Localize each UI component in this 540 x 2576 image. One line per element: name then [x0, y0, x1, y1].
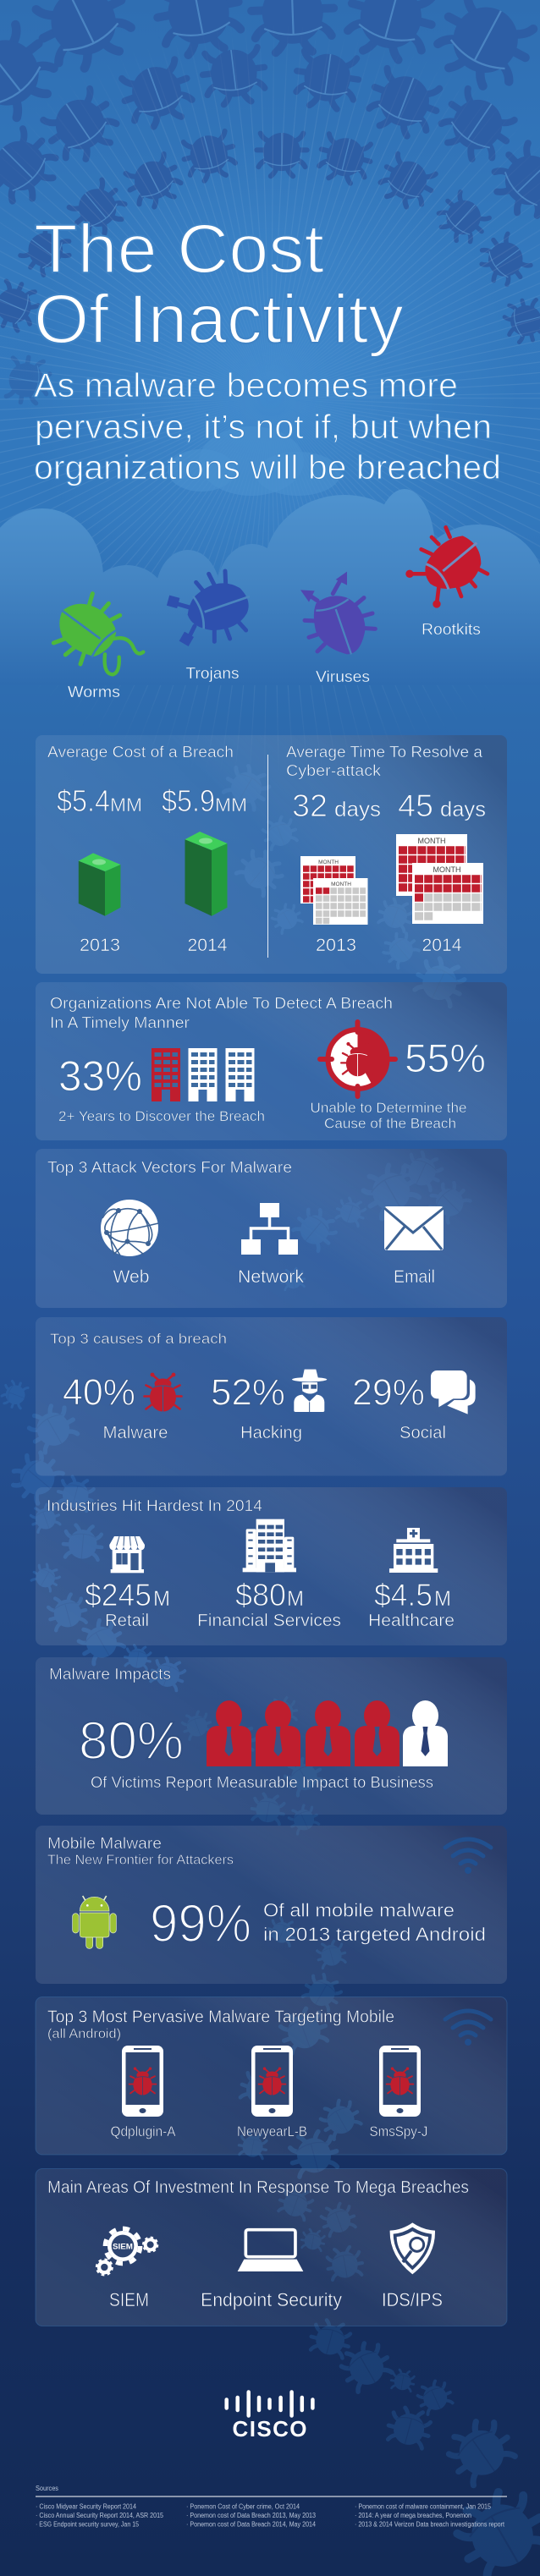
icon: SIEM gears [96, 2228, 157, 2275]
heading: average time: Average Time To Resolve a [286, 744, 483, 761]
sources: · 2014: A year of mega breaches, Ponemon [355, 2512, 471, 2519]
stat: financial services: Financial Services [197, 1612, 341, 1630]
bug labels: Rootkits [422, 621, 481, 638]
labels: SIEM [109, 2289, 149, 2310]
bug labels: Worms [68, 684, 120, 700]
icon: hacker [292, 1370, 327, 1412]
phone: Qdplugin-A: Qdplugin-A [110, 2123, 176, 2139]
stat: 2013 cost: MM [110, 794, 142, 816]
heading: In A Timely Manner [50, 1014, 190, 1031]
icon: email [384, 1206, 444, 1250]
icon: calendars 2014: MONTH [418, 837, 445, 845]
labels [103, 1424, 446, 1442]
subtitle: As malware becomes more [34, 367, 458, 404]
stat: 33%: 33% [58, 1052, 142, 1100]
icon: calendars 2013 [300, 856, 367, 925]
heading [50, 995, 393, 1031]
heading: Mobile Malware [47, 1835, 162, 1852]
cisco logo: CISCO [232, 2416, 306, 2441]
stat: financial services: M [287, 1587, 304, 1611]
background pattern: scattered bug trail [0, 761, 540, 2576]
text: android claim: in 2013 targeted Android [263, 1924, 486, 1945]
icon: network [241, 1203, 298, 1255]
labels: Malware [103, 1424, 168, 1442]
icon: buildings [152, 1048, 254, 1101]
panel: attack vectors [36, 1149, 507, 1308]
heading: average cost: Average Cost of a Breach [47, 744, 234, 761]
text: android claim [263, 1900, 486, 1945]
labels: Email [394, 1267, 435, 1287]
bug labels: Viruses [316, 668, 370, 685]
stat: 99%: 99% [150, 1894, 251, 1953]
labels [113, 1267, 435, 1287]
icon: SIEM gears: SIEM [113, 2242, 133, 2250]
icon: calendars 2014: MONTH [433, 865, 460, 874]
stat: 45 days: 45 [398, 788, 433, 823]
caption: unable to determine: Unable to Determine the [310, 1101, 467, 1116]
heading: The New Frontier for Attackers [47, 1853, 234, 1868]
icon: money stack 2013 [79, 853, 120, 916]
stat: retail: M [153, 1587, 170, 1611]
sources: Sources [36, 2485, 58, 2492]
stat: 32 days: days [334, 798, 381, 821]
heading: Top 3 causes of a breach [50, 1331, 227, 1347]
caption: Of Victims Report Measurable Impact to Business [91, 1774, 433, 1791]
sources: · 2013 & 2014 Verizon Data breach investigations report [355, 2521, 505, 2528]
icon: shield [390, 2222, 435, 2274]
stat: 2013 cost [57, 783, 142, 818]
icon: android [73, 1896, 116, 1948]
phone: Qdplugin-A [110, 2046, 176, 2139]
caption: 2+ years: 2+ Years to Discover the Breach [58, 1109, 265, 1124]
icon: speech bubbles [431, 1370, 476, 1414]
heading: Malware Impacts [49, 1666, 171, 1683]
stat: retail [85, 1578, 170, 1630]
cisco logo [227, 2392, 312, 2441]
heading: average time: Cyber-attack [286, 762, 382, 779]
icon: virus bug [300, 572, 375, 654]
phone: NewyearL-B: NewyearL-B [237, 2123, 307, 2139]
stat: 2013 cost: $5.4 [57, 783, 110, 818]
sources: · Ponemon cost of Data Breach 2013, May 2013 [186, 2512, 316, 2519]
background pattern: radial bugs [0, 0, 540, 406]
sources: · Cisco Midyear Security Report 2014 [36, 2502, 136, 2511]
stat: 32 days [292, 788, 381, 823]
sources: · Cisco Annual Security Report 2014, ASR 2015 [36, 2512, 163, 2519]
stat: financial services: $80 [235, 1578, 286, 1612]
stat: 2014 cost: MM [215, 794, 247, 816]
sources: · Ponemon cost of malware containment, Jan 2015 [355, 2502, 491, 2511]
panel: causes [36, 1317, 507, 1475]
icon: calendars 2013: MONTH [318, 860, 339, 865]
title: The Cost [34, 211, 324, 288]
stat: 2014 cost: $5.9 [162, 783, 215, 818]
panel: average cost and time [36, 735, 507, 974]
icon: worm bug [53, 594, 143, 674]
labels: Endpoint Security [201, 2289, 342, 2310]
stat: 55%: 55% [405, 1035, 486, 1080]
text: android claim: Of all mobile malware [263, 1900, 455, 1920]
title [34, 211, 404, 358]
icon: money stack 2014 [185, 832, 227, 916]
stat: healthcare: $4.5 [374, 1578, 433, 1612]
stat: financial services [197, 1578, 341, 1630]
heading: Industries Hit Hardest In 2014 [47, 1497, 262, 1514]
caption: unable to determine [310, 1101, 467, 1132]
heading: Top 3 Attack Vectors For Malware [47, 1159, 292, 1176]
stat: healthcare [368, 1578, 455, 1630]
icon: wifi [445, 2011, 491, 2046]
heading: (all Android) [47, 2027, 121, 2041]
labels: Network [238, 1267, 304, 1287]
heading [47, 1835, 234, 1868]
heading: Top 3 Most Pervasive Malware Targeting Mobile [47, 2008, 394, 2027]
icon: calendars 2013: MONTH [331, 882, 351, 887]
year labels: cost: 2013 [80, 936, 120, 955]
icon: wifi [445, 1839, 491, 1874]
panel: malware impacts [36, 1657, 507, 1815]
stat: 45 days [398, 788, 486, 823]
stat: 29%: 29% [352, 1372, 425, 1413]
stat: 80%: 80% [79, 1711, 184, 1771]
labels: Web [113, 1267, 149, 1287]
stat: 52%: 52% [211, 1372, 285, 1413]
year labels: time [316, 936, 462, 955]
phone: SmsSpy-J: SmsSpy-J [369, 2123, 428, 2139]
year labels: cost [80, 936, 228, 955]
icon: rootkit bug [405, 527, 488, 608]
sources: · Ponemon Cost of Cyber crime, Oct 2014 [186, 2502, 300, 2511]
stat: healthcare: M [434, 1587, 451, 1611]
sources: · Ponemon cost of Data Breach 2014, May 2014 [186, 2521, 316, 2528]
icon: hospital [389, 1528, 438, 1573]
icon: trojan bug [167, 571, 250, 646]
subtitle [34, 367, 501, 486]
panel: industries [36, 1487, 507, 1645]
heading: Organizations Are Not Able To Detect A Breach [50, 995, 393, 1012]
panel: detection [36, 982, 507, 1140]
panel: investment [36, 2169, 507, 2326]
icon: store [109, 1536, 145, 1573]
year labels: cost: 2014 [188, 936, 228, 955]
heading: Main Areas Of Investment In Response To Mega Breaches [47, 2178, 469, 2197]
stat: 40%: 40% [63, 1372, 135, 1413]
stat: retail: $245 [85, 1578, 152, 1612]
labels: Hacking [240, 1424, 302, 1442]
heading: average time [286, 744, 483, 779]
stat: 2014 cost [162, 783, 247, 818]
subtitle: organizations will be breached [34, 449, 501, 486]
sources: · ESG Endpoint security survey, Jan 15 [36, 2521, 139, 2528]
phone: SmsSpy-J [369, 2046, 428, 2139]
icon: office [243, 1519, 296, 1572]
phone: NewyearL-B [237, 2046, 307, 2139]
stat: 32 days: 32 [292, 788, 328, 823]
bug labels [68, 621, 481, 700]
title: Of Inactivity [34, 281, 404, 358]
clouds [0, 426, 540, 685]
caption: unable to determine: Cause of the Breach [324, 1117, 456, 1132]
stat: healthcare: Healthcare [368, 1612, 455, 1630]
labels [109, 2289, 443, 2310]
stat: 45 days: days [440, 798, 486, 821]
year labels: time: 2013 [316, 936, 356, 955]
panel: top mobile malware [36, 1997, 507, 2155]
subtitle: pervasive, it’s not if, but when [35, 409, 492, 446]
icon: globe [101, 1200, 158, 1256]
icon: calendars 2014 [396, 834, 483, 924]
icon: people [207, 1700, 448, 1766]
labels: Social [399, 1424, 446, 1442]
panel: mobile malware [36, 1826, 507, 1984]
icon: target with bug [320, 1022, 395, 1096]
year labels: time: 2014 [422, 936, 462, 955]
sources [36, 2485, 507, 2528]
bug labels: Trojans [186, 665, 239, 682]
icon: malware bug [144, 1373, 181, 1411]
heading [47, 2008, 394, 2041]
icon: laptop [238, 2230, 303, 2271]
labels: IDS/IPS [382, 2289, 443, 2310]
stat: retail: Retail [105, 1612, 149, 1630]
